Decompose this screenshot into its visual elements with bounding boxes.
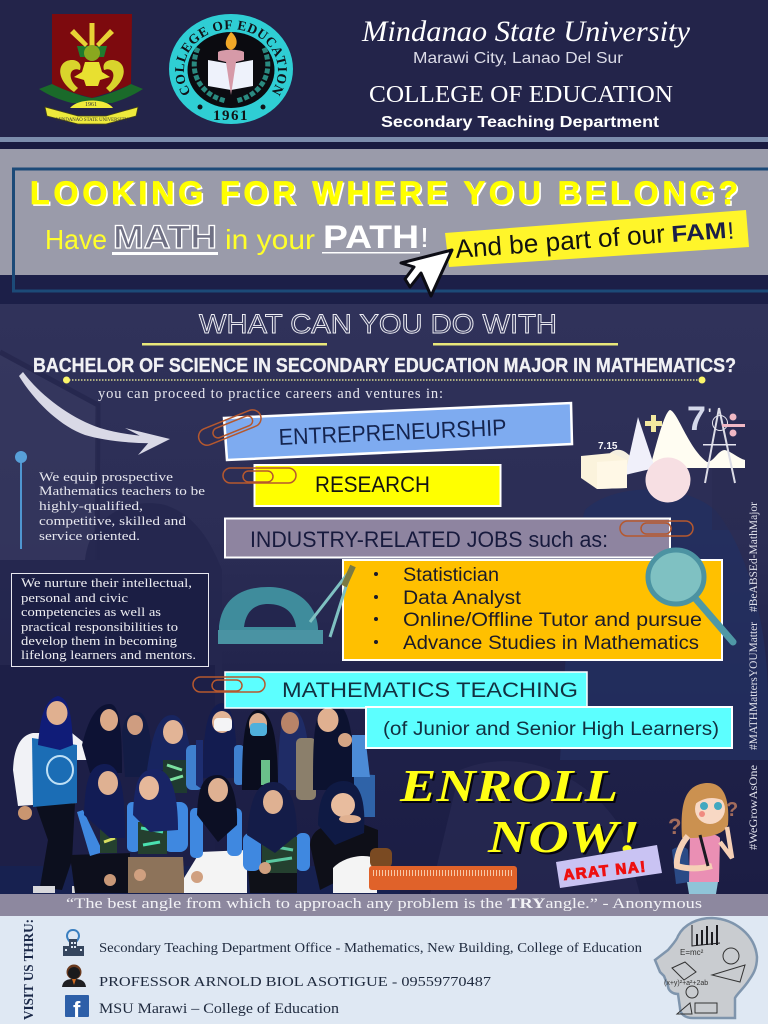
description box: nurture learners: personal and civic	[21, 591, 129, 605]
icon: ruler	[369, 866, 517, 890]
description box: nurture learners: develop them in becoming	[21, 634, 178, 648]
card: mathematics teaching	[225, 672, 587, 708]
description box: nurture learners: competencies as well as	[21, 605, 161, 619]
call to action: enroll now: ENROLL	[399, 760, 618, 811]
job list items: Data Analyst	[403, 588, 522, 609]
students back row	[82, 702, 375, 817]
students front row	[70, 764, 392, 893]
tagline banner: and be part of our fam	[445, 210, 749, 267]
badge: arat na: ARAT NA!	[563, 858, 646, 884]
footer: facebook page: MSU Marawi – College of Education	[99, 1001, 340, 1017]
footer panel	[0, 916, 768, 1024]
quote band	[0, 894, 768, 916]
job list panel	[343, 560, 722, 660]
hashtags vertical	[748, 502, 760, 850]
description: equip teachers: competitive, skilled and	[39, 514, 187, 528]
headline: looking for where you belong: LOOKING FOR WHERE YOU BELONG?	[30, 175, 738, 211]
arrow: curved pointer	[19, 372, 170, 455]
call to action: enroll now: NOW!	[489, 813, 642, 864]
card: industry-related jobs	[225, 518, 670, 558]
intro line: you can proceed to practice careers and ventures in:	[98, 386, 443, 402]
footer: office address: Secondary Teaching Department Office - Mathematics, New Building, College of Education	[99, 940, 642, 955]
icon: facebook	[65, 995, 89, 1022]
headline: looking for where you belong: LOOKING FOR WHERE YOU BELONG?	[32, 176, 740, 212]
card: research	[254, 465, 500, 506]
hashtags vertical: #WeGrowAsOne	[748, 765, 760, 850]
hashtags vertical: #MATHMattersYOUMatter	[748, 622, 760, 750]
middle section background	[0, 304, 768, 894]
card: entrepreneurship: ENTREPRENEURSHIP	[278, 414, 507, 450]
student standing left	[13, 696, 93, 893]
illustration: thinking girl: ?	[668, 814, 681, 839]
job list items	[374, 565, 702, 654]
job list items: Advance Studies in Mathematics	[403, 633, 699, 654]
quote band: “The best angle from which to approach any problem is the TRY angle.” - Anonymous	[66, 896, 702, 912]
description box: nurture learners: lifelong learners and mentors.	[21, 648, 196, 662]
dark band under headline	[0, 275, 768, 304]
hashtags vertical: #BeABSEd-MathMajor	[748, 502, 760, 612]
card: junior and senior high: (of Junior and Senior High Learners)	[383, 718, 719, 740]
icon: magnifying glass	[648, 550, 733, 642]
icon: head with math doodles	[655, 918, 757, 1018]
illustration: thinking girl	[668, 783, 738, 894]
card: mathematics teaching: MATHEMATICS TEACHING	[282, 678, 578, 702]
icon: facebook: f	[73, 997, 81, 1022]
icon: office building	[63, 930, 84, 956]
card: research: RESEARCH	[315, 472, 430, 497]
icon: paperclip 1	[196, 407, 264, 448]
logo: Mindanao State University shield: 1961	[85, 102, 97, 108]
card: junior and senior high	[366, 707, 732, 748]
description: equip teachers	[15, 451, 206, 549]
math illustration: shapes and symbols: '	[708, 405, 711, 421]
footer: contact person: PROFESSOR ARNOLD BIOL ASOTIGUE - 09559770487	[99, 975, 491, 990]
tagline banner: and be part of our fam: !	[726, 218, 735, 245]
description: equip teachers: service oriented.	[39, 529, 140, 543]
icon: protractor and compass	[218, 566, 353, 644]
logo: College of Education seal: 1961	[213, 108, 249, 124]
call to action: enroll now: NOW!	[487, 811, 640, 862]
icon: paperclip 2	[223, 468, 296, 483]
tagline banner: and be part of our fam: And be part of our	[454, 218, 666, 264]
headline frame	[14, 169, 768, 291]
description: equip teachers: We equip prospective	[39, 470, 174, 484]
university location: Marawi City, Lanao Del Sur	[413, 50, 624, 67]
university name: Mindanao State University	[361, 15, 691, 48]
icon: head with math doodles: E=mc²	[680, 948, 704, 957]
subheadline: have math in your path: in your	[225, 224, 315, 255]
header band	[0, 0, 768, 137]
dotted divider	[63, 376, 706, 384]
description: equip teachers: Mathematics teachers to be	[39, 484, 206, 498]
college name: COLLEGE OF EDUCATION	[369, 82, 673, 108]
math illustration: shapes and symbols	[581, 400, 745, 502]
subheadline: have math in your path: PATH	[323, 219, 419, 255]
description box: nurture learners: practical responsibilities to	[21, 620, 178, 634]
header stripes	[0, 137, 768, 149]
logo: Mindanao State University shield: MINDANAO STATE UNIVERSITY	[56, 117, 128, 123]
logo: Mindanao State University shield	[39, 14, 143, 124]
description: equip teachers: highly-qualified,	[39, 499, 143, 513]
department name: Secondary Teaching Department	[381, 114, 659, 131]
subheadline: have math in your path	[45, 219, 429, 255]
card: entrepreneurship	[224, 403, 572, 460]
footer label: visit us thru: VISIT US THRU:	[22, 919, 37, 1020]
math illustration: shapes and symbols: 7.15	[598, 441, 618, 452]
title underlines	[142, 343, 618, 346]
description box: nurture learners	[12, 574, 208, 666]
call to action: enroll now	[399, 760, 642, 864]
icon: paperclip 3	[620, 521, 693, 536]
icon: head with math doodles: (x+y)²+a²+2ab	[664, 980, 708, 987]
badge: arat na	[556, 845, 662, 888]
subheadline: have math in your path: Have	[45, 224, 107, 255]
job list items: Statistician	[403, 565, 499, 586]
description box: nurture learners: We nurture their intellectual,	[21, 576, 192, 590]
call to action: enroll now: ENROLL	[401, 762, 620, 813]
icon: cursor arrow	[401, 250, 452, 296]
group photo of students	[13, 696, 392, 893]
icon: person with headset	[62, 964, 86, 987]
subheadline: have math in your path: MATH	[113, 219, 217, 255]
subheadline: have math in your path: !	[420, 222, 429, 253]
tagline banner: and be part of our fam: FAM	[670, 217, 727, 247]
illustration: thinking girl: ?	[726, 799, 738, 821]
logo: College of Education seal: COLLEGE OF EDUCATION	[175, 20, 287, 96]
headline panel background	[0, 149, 768, 275]
math illustration: shapes and symbols: 7	[687, 400, 706, 438]
icon: paperclip 4	[193, 677, 265, 692]
card: industry-related jobs: INDUSTRY-RELATED JOBS such as:	[250, 527, 608, 552]
section title: what can you do with: WHAT CAN YOU DO WITH	[199, 309, 557, 339]
job list items: Online/Offline Tutor and pursue	[403, 610, 702, 631]
